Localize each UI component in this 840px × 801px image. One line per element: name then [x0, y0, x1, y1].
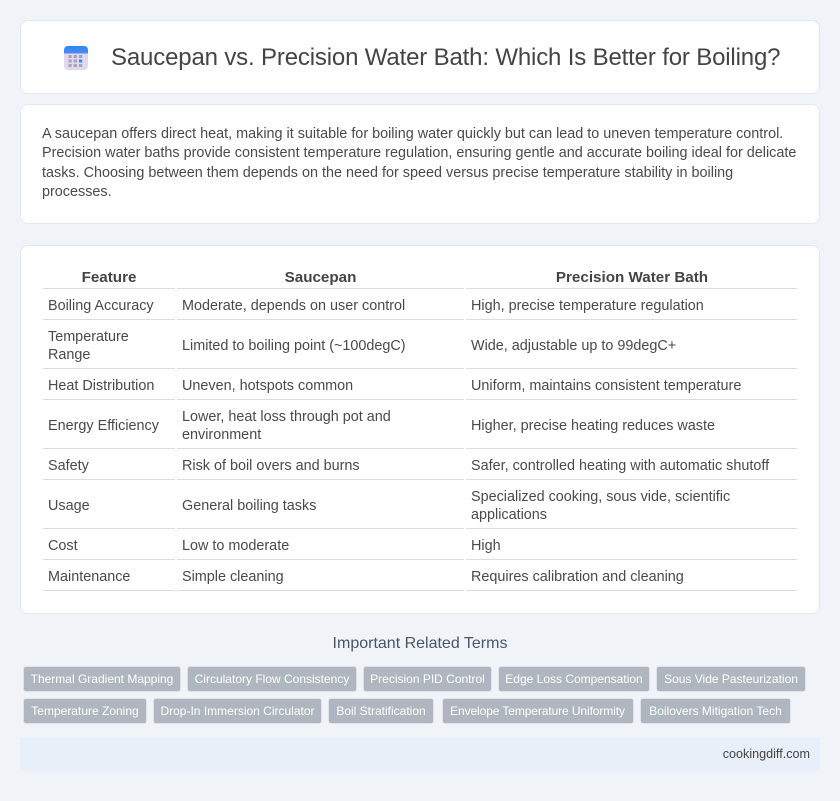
- table rows: High: [471, 538, 501, 554]
- heading: related terms: Important Related Terms: [333, 635, 507, 652]
- table rows: Low to moderate: [182, 538, 289, 554]
- table rows: Usage: [48, 498, 90, 514]
- footer bar: [20, 737, 820, 771]
- table rows: Range: [48, 347, 90, 363]
- table rows: Energy Efficiency: [48, 418, 159, 434]
- tags: related terms: Sous Vide Pasteurization: [664, 672, 798, 686]
- table rows: Maintenance: [48, 569, 130, 585]
- tags: related terms: Drop-In Immersion Circulator: [160, 704, 315, 718]
- title: Saucepan vs. Precision Water Bath: Which Is Better for Boiling?: [111, 44, 780, 71]
- table rows: environment: [182, 427, 261, 443]
- table rows: High, precise temperature regulation: [471, 298, 704, 314]
- table rows: Higher, precise heating reduces waste: [471, 418, 715, 434]
- table rows: Uniform, maintains consistent temperature: [471, 378, 741, 394]
- table rows: Specialized cooking, sous vide, scientific: [471, 489, 730, 505]
- table rows: Uneven, hotspots common: [182, 378, 353, 394]
- tags: related terms: Precision PID Control: [370, 672, 485, 686]
- table rows: Heat Distribution: [48, 378, 154, 394]
- table rows: Cost: [48, 538, 78, 554]
- table rows: Wide, adjustable up to 99degC+: [471, 338, 676, 354]
- footer text: cookingdiff.com: [723, 747, 810, 761]
- tags: related terms: Boilovers Mitigation Tech: [649, 704, 782, 718]
- table rows: Lower, heat loss through pot and: [182, 409, 391, 425]
- table header: Feature: [82, 269, 136, 286]
- table rows: Boiling Accuracy: [48, 298, 154, 314]
- tags: related terms: Envelope Temperature Uniformity: [450, 704, 625, 718]
- table header: [82, 269, 708, 286]
- text block: summary: processes.: [42, 184, 112, 200]
- text block: summary: tasks. Choosing between them depends on the need for speed versus precise temperature stability in boiling: [42, 165, 733, 181]
- tags: related terms: Edge Loss Compensation: [505, 672, 643, 686]
- panel: summary: [20, 104, 820, 224]
- table rows: Risk of boil overs and burns: [182, 458, 360, 474]
- tags: related terms: Thermal Gradient Mapping: [31, 672, 173, 686]
- panel: title card: [20, 20, 820, 94]
- tags: related terms: Temperature Zoning: [31, 704, 139, 718]
- table rows: Requires calibration and cleaning: [471, 569, 684, 585]
- table header: Saucepan: [285, 269, 356, 286]
- table rows: Safer, controlled heating with automatic shutoff: [471, 458, 769, 474]
- table rows: applications: [471, 507, 547, 523]
- text block: summary: [42, 126, 796, 200]
- table rows: Safety: [48, 458, 89, 474]
- icon: calendar: [64, 46, 88, 70]
- table header: Precision Water Bath: [556, 269, 708, 286]
- tags: related terms: [23, 666, 806, 724]
- panel: comparison table: [20, 245, 820, 614]
- tags: related terms: Circulatory Flow Consistency: [195, 672, 349, 686]
- table rows: Moderate, depends on user control: [182, 298, 405, 314]
- table rows: Simple cleaning: [182, 569, 284, 585]
- table rows: [43, 288, 797, 591]
- tags: related terms: Boil Stratification: [336, 704, 426, 718]
- table rows: General boiling tasks: [182, 498, 316, 514]
- table rows: Temperature: [48, 329, 129, 345]
- text block: summary: Precision water baths provide consistent temperature regulation, ensuring gentle and accurate boiling ideal for delicate: [42, 145, 796, 161]
- text block: summary: A saucepan offers direct heat, making it suitable for boiling water quickly but can lead to uneven temperature control.: [42, 126, 783, 142]
- table rows: Limited to boiling point (~100degC): [182, 338, 406, 354]
